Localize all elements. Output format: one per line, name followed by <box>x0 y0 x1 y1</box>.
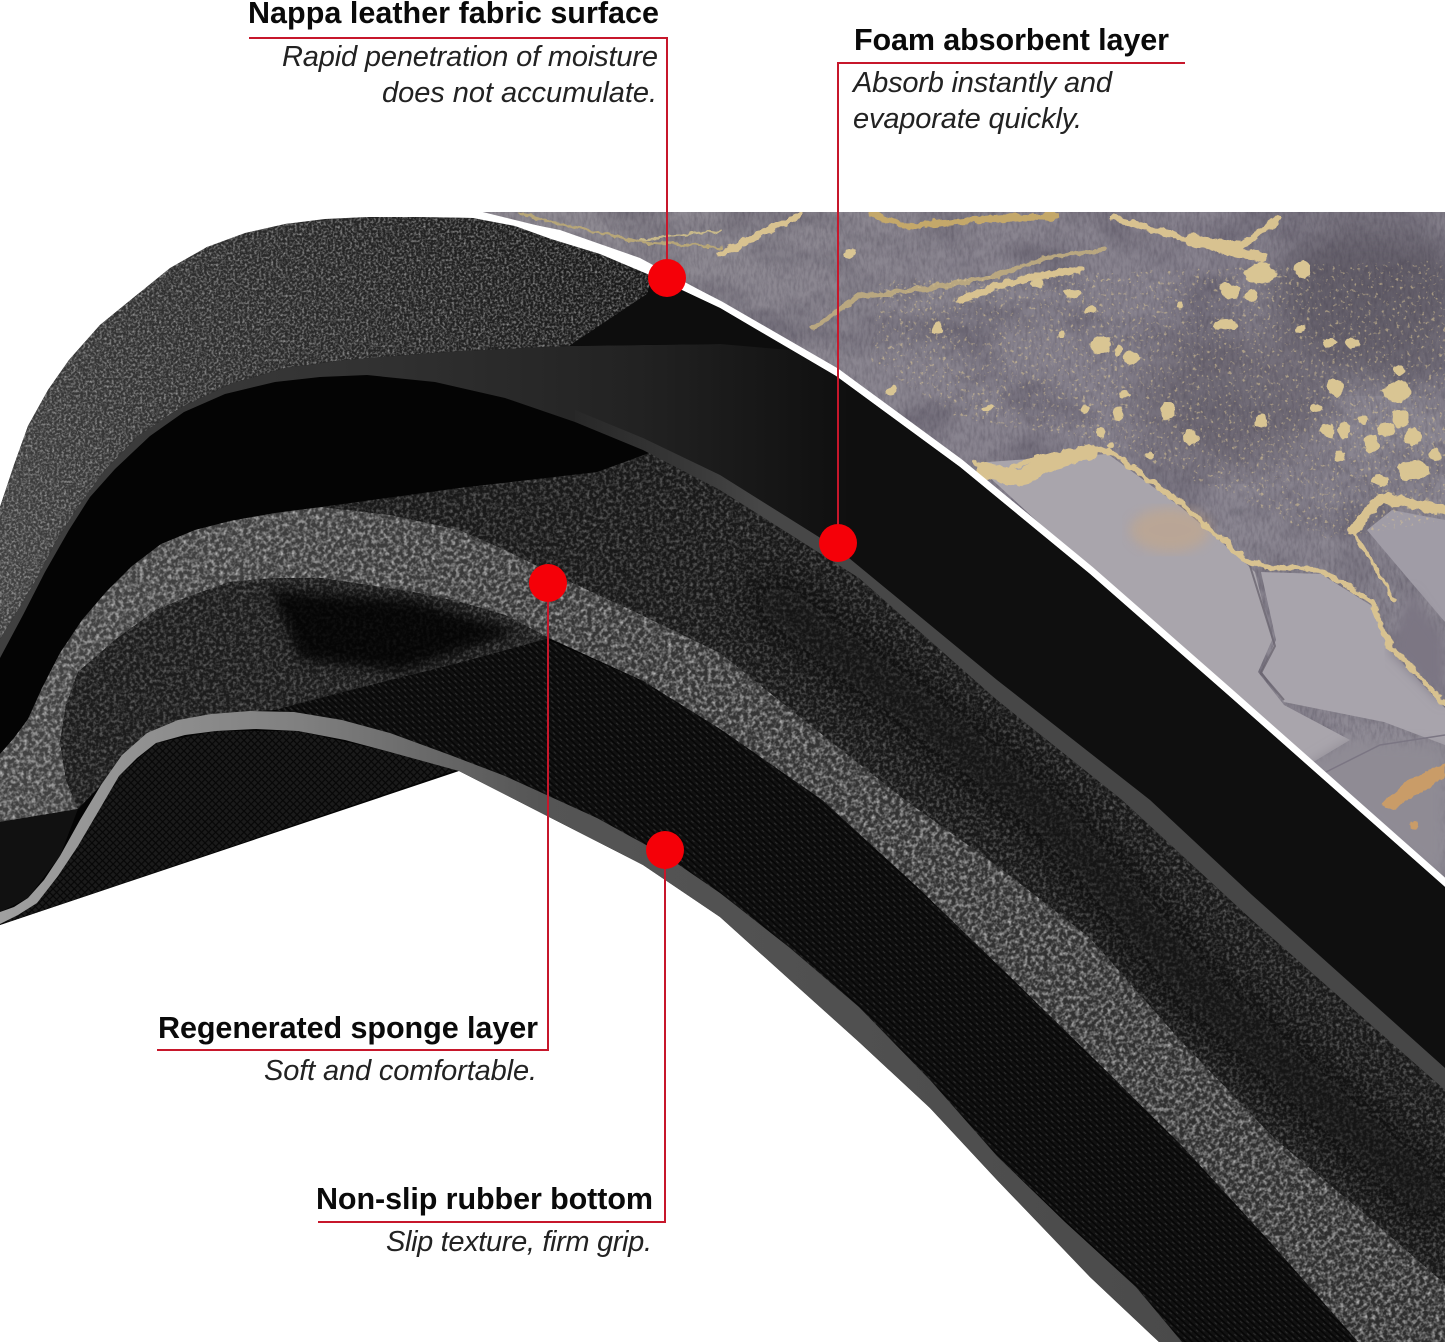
marker dot <box>819 524 857 562</box>
heading: Non-slip rubber bottom <box>316 1182 653 1216</box>
callout: Foam absorbent layer <box>819 23 1185 562</box>
foam black wedge <box>569 276 790 350</box>
sponge layer: light textured edge <box>0 507 1445 1342</box>
rubber mesh base <box>275 639 1358 1342</box>
leader line <box>249 38 667 278</box>
hollow shadow <box>270 590 520 672</box>
gold speckle <box>870 260 1445 540</box>
heading: Regenerated sponge layer <box>158 1011 538 1045</box>
rubber edge band <box>0 711 1182 1342</box>
marker dot <box>648 259 686 297</box>
sponge dark shading <box>760 590 1445 1210</box>
description: Soft and comfortable. <box>264 1055 537 1087</box>
hollow under sponge <box>60 578 551 809</box>
rubber underside strip left <box>0 809 78 912</box>
heading: Foam absorbent layer <box>854 23 1169 57</box>
description: Absorb instantly and <box>851 67 1113 99</box>
white surface edge <box>470 213 1445 883</box>
leader line <box>318 850 665 1222</box>
description: Rapid penetration of moisture <box>282 41 658 73</box>
callout: Non-slip rubber bottom <box>316 831 684 1258</box>
callout: Nappa leather fabric surface <box>248 0 686 297</box>
callout: Regenerated sponge layer <box>157 564 567 1087</box>
foam layer textured underside <box>0 217 660 639</box>
rubber underside left <box>0 731 459 925</box>
marker dot <box>529 564 567 602</box>
description line 2: does not accumulate. <box>382 77 657 109</box>
leader line <box>157 583 548 1050</box>
description line 2: evaporate quickly. <box>853 103 1082 135</box>
foam layer front face <box>0 308 1445 1090</box>
marble printed surface <box>460 205 1445 895</box>
description: Slip texture, firm grip. <box>386 1226 652 1258</box>
sponge layer: dark upper surface <box>321 452 1445 1290</box>
gold veins <box>519 213 1445 829</box>
marker dot <box>646 831 684 869</box>
leader line <box>838 63 1185 543</box>
foam grey edge stripe <box>575 410 1445 1090</box>
